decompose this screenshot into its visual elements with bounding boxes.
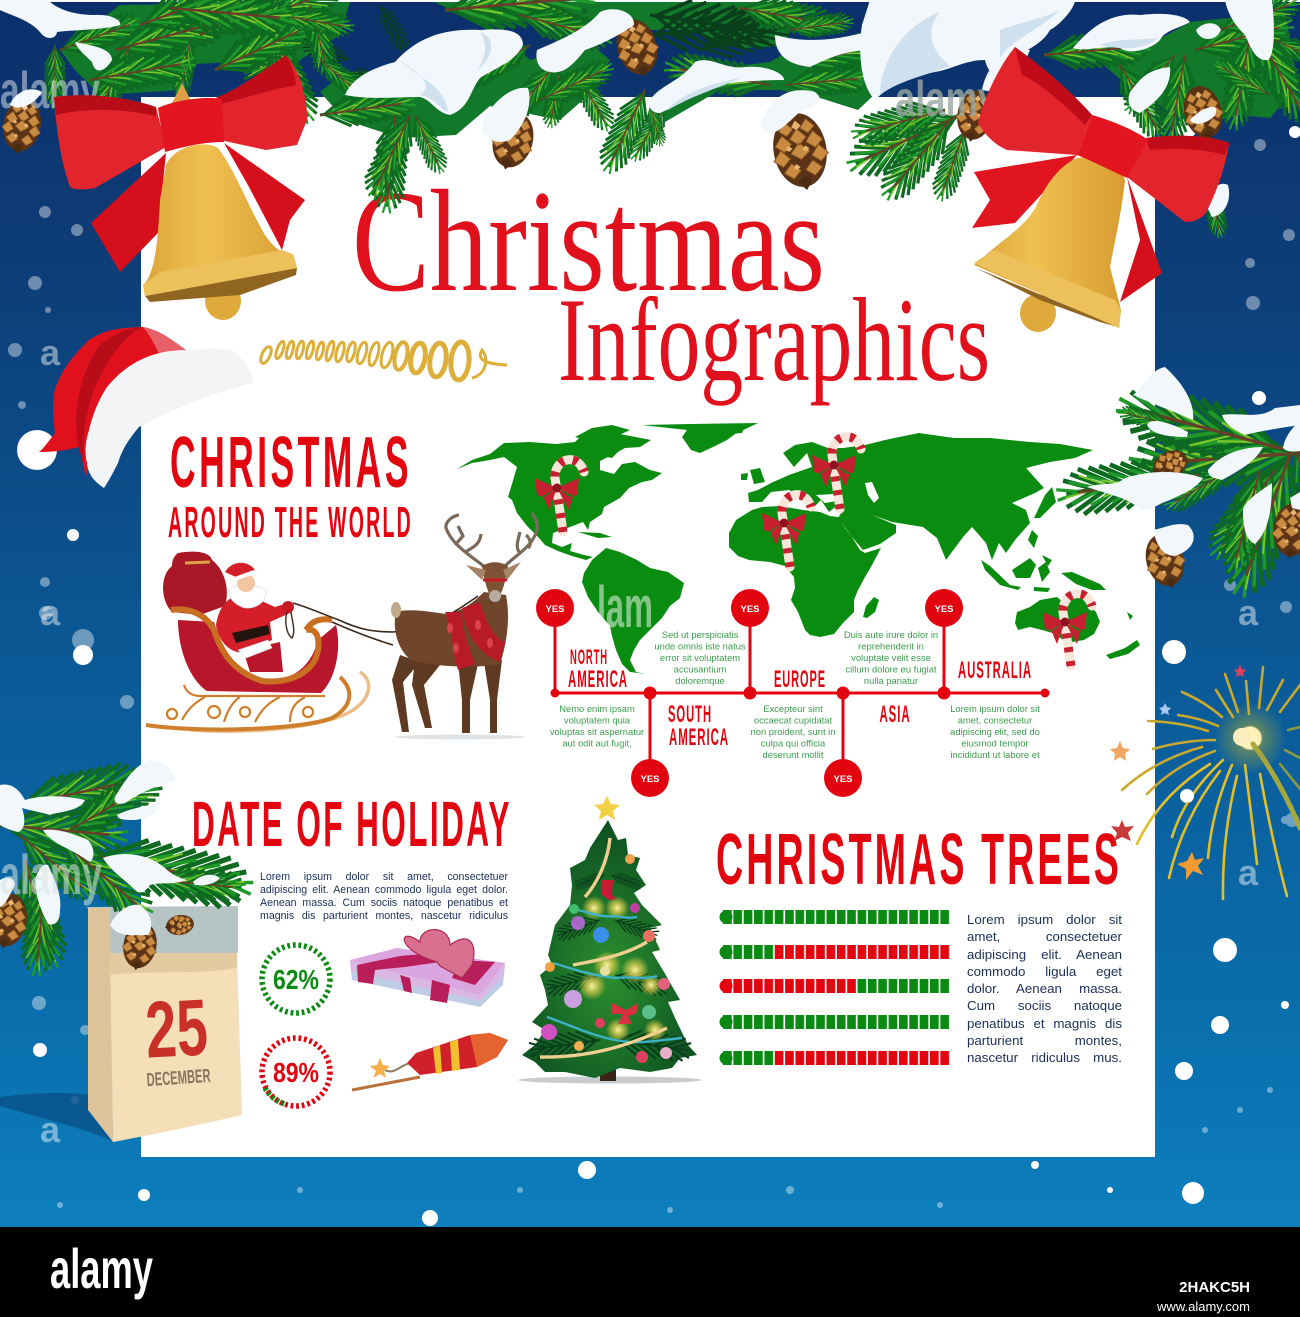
bow right loop inner [216, 55, 296, 105]
top white sliver [0, 0, 1300, 2]
yes labels: YES [545, 604, 565, 615]
bell underside [145, 268, 297, 302]
bar 4 [720, 1015, 950, 1029]
region descriptions: occaecat cupidatat [754, 714, 832, 726]
region descriptions: unde omnis iste natus [654, 640, 746, 652]
text block: christmas trees: Cum sociis natoque [967, 998, 1122, 1013]
bell hanger [172, 83, 192, 103]
watermark fragments: a [40, 592, 61, 633]
reins [293, 596, 478, 645]
footer image id: 2HAKC5H [1179, 1279, 1250, 1296]
calendar torn strip [110, 953, 237, 975]
watermark fragments: a [1238, 592, 1259, 633]
gauge: 62 percent: 62% [273, 964, 319, 995]
Eurasia [748, 433, 1093, 560]
calendar pine cone [119, 919, 161, 973]
Greenland [642, 423, 758, 453]
pine cones [0, 15, 1229, 195]
bridle [483, 578, 507, 582]
rein loop [286, 612, 294, 638]
firework rocket [352, 1033, 508, 1090]
snow on garland [0, 0, 1274, 217]
Santa beard [229, 584, 266, 608]
rear runner [190, 672, 369, 731]
New Zealand [1106, 612, 1140, 659]
fireworks [1110, 665, 1300, 899]
candy cane: North America [535, 460, 584, 532]
watermark fragments: a [1240, 74, 1257, 107]
text block: date of holiday [260, 871, 508, 922]
region descriptions: accusantium [674, 664, 726, 674]
watermark fragments: a [40, 332, 61, 373]
firework rays [1122, 667, 1300, 899]
region descriptions: cillum dolore eu fugiat [845, 664, 937, 674]
branch pine cones [1139, 529, 1191, 593]
heading: Christmas around the world [168, 423, 413, 547]
bar 5 [720, 1051, 950, 1065]
Santa coat fur [238, 640, 272, 658]
watermark fragments: a [1238, 852, 1259, 893]
region names: AMERICA [669, 724, 729, 751]
stocking ornament [601, 880, 617, 900]
hat pompom [17, 430, 57, 470]
region descriptions: non proident, sunt in [751, 726, 835, 737]
region names [568, 646, 1032, 751]
bell clapper [205, 282, 241, 320]
region descriptions: voluptate velit esse [851, 652, 931, 663]
sack tie [185, 562, 210, 563]
left pine branch [0, 758, 257, 978]
region names: NORTH [570, 646, 608, 669]
Iceland and UK [728, 426, 765, 484]
world map [457, 423, 1140, 674]
Santa coat [216, 595, 292, 652]
branch foliage [0, 758, 257, 978]
gift box [350, 930, 505, 1007]
branch snow [1087, 367, 1300, 556]
bead garland [540, 838, 667, 1057]
Santa hat [17, 327, 254, 488]
candy cane: Africa [762, 495, 811, 567]
Caspian and Black Sea [816, 482, 879, 503]
bar 1 [720, 910, 950, 924]
tree top star [594, 796, 620, 820]
watermark fragment at top left: alamy [0, 62, 100, 120]
reindeer tail [391, 602, 401, 618]
calendar pages [110, 953, 242, 1142]
Santa face [237, 574, 255, 592]
bow left loop inner [54, 95, 156, 116]
watermark fragment on South America: lam [597, 575, 653, 640]
region descriptions: eiusmod tempor [961, 738, 1029, 748]
left bell [54, 55, 307, 320]
title line: Infographics: Infographics [558, 273, 990, 406]
gauge: 89 percent: 89% [273, 1057, 319, 1088]
reindeer [391, 513, 537, 740]
Japan [1034, 487, 1056, 518]
reindeer muzzle [489, 590, 501, 602]
gauge: 62 percent [262, 945, 330, 1013]
branch cone right [1270, 502, 1300, 560]
text block: christmas trees: commodo ligula eget [967, 964, 1122, 979]
text block: christmas trees: parturient montes, [967, 1033, 1122, 1048]
reindeer legs [392, 655, 502, 733]
Santa mitten [282, 601, 294, 613]
firework core [1233, 728, 1251, 746]
tree ground shadow [518, 1076, 702, 1084]
calendar spine [88, 908, 113, 1142]
hat highlight [143, 327, 186, 356]
bell lip [974, 250, 1121, 328]
branch pine cones [0, 891, 32, 952]
branch snow [0, 760, 220, 935]
region descriptions: deserunt mollit [763, 749, 824, 760]
region descriptions: Nemo enim ipsam [559, 703, 635, 714]
gauge: 89 percent [262, 1038, 330, 1106]
Santa hat [225, 563, 255, 578]
reindeer head [482, 562, 508, 602]
Australia [1015, 596, 1100, 643]
region descriptions: nulla pariatur [864, 675, 918, 686]
region descriptions: doloremque [675, 675, 725, 686]
foliage [522, 820, 697, 1078]
Africa [729, 506, 881, 637]
calendar backing board [87, 906, 238, 953]
text block: christmas trees [967, 912, 1122, 1065]
pine sprigs [45, 0, 1300, 240]
trunk [600, 1068, 616, 1081]
timeline axis [555, 608, 1045, 778]
region names: EUROPE [774, 666, 826, 693]
bell body [974, 157, 1125, 328]
region descriptions: incididunt ut labore et [950, 749, 1040, 760]
stock footer bar [0, 1227, 1300, 1317]
candy cane: Europe [812, 437, 861, 509]
hat fold [76, 327, 143, 465]
gift ribbon [357, 952, 495, 1003]
bell clapper [1020, 294, 1056, 332]
title [352, 160, 990, 406]
sleigh runner [146, 677, 349, 729]
South America [582, 548, 684, 674]
Madagascar [863, 597, 879, 618]
snowball on firework [1180, 790, 1194, 802]
yes markers [536, 589, 963, 797]
branch foliage [1054, 378, 1300, 604]
yes labels [545, 604, 954, 785]
watermark fragments: a [40, 1109, 61, 1150]
snow shading [400, 10, 1158, 112]
timeline nodes [550, 686, 1050, 700]
gift bow [404, 930, 474, 978]
calendar date: 25 [143, 982, 210, 1075]
firework stars [1110, 665, 1246, 880]
region descriptions: voluptatem quia [564, 714, 631, 726]
sleigh with Santa [146, 552, 478, 731]
Cuba [578, 532, 612, 538]
reindeer body [395, 592, 508, 667]
cone tips behind branch [163, 912, 196, 938]
bell lip [143, 250, 297, 296]
region descriptions: Duis aute irure dolor in [844, 629, 938, 640]
bar 2 [720, 945, 950, 959]
yes labels: YES [740, 604, 760, 615]
text block: date of holiday: Lorem ipsum dolor sit amet, consectetuer [260, 871, 508, 883]
region descriptions: error sit voluptatem [660, 652, 740, 663]
hat red cap [39, 327, 186, 477]
foliage needles [528, 1028, 602, 1062]
progress bars [720, 910, 950, 1065]
red harness [445, 612, 475, 670]
cyan garland [547, 910, 682, 1042]
bow left loop [978, 47, 1092, 155]
right pine branch [1054, 367, 1300, 604]
footer url: www.alamy.com [1156, 1299, 1250, 1314]
watermark fragment on right bow: alamy [895, 71, 998, 127]
white infographic panel [141, 97, 1155, 1157]
New Guinea [1061, 572, 1106, 590]
antlers [446, 513, 537, 568]
Arctic islands [575, 425, 630, 458]
cone behind branch [1145, 444, 1193, 487]
yes labels: YES [640, 774, 660, 785]
bow right loop [1127, 136, 1229, 222]
bow lower tails [91, 153, 166, 272]
text: CHRISTMAS [170, 423, 412, 503]
region descriptions: Lorem ipsum dolor sit [950, 703, 1040, 714]
timeline: AUSTRALIA [958, 657, 1032, 684]
yes labels: YES [833, 774, 853, 785]
bow lower left tail [972, 155, 1077, 228]
region descriptions: Excepteur sint [763, 703, 823, 714]
text block: date of holiday: Aenean massa. Cum sociis natoque penatibus et [260, 897, 508, 909]
region descriptions: Sed ut perspiciatis [662, 629, 739, 640]
text block: christmas trees: amet, consectetuer [967, 929, 1122, 944]
Christmas tree [518, 796, 702, 1084]
Southeast Asian islands [981, 530, 1052, 592]
text: AROUND THE WORLD [168, 498, 413, 547]
region descriptions: reprehenderit in [858, 640, 924, 652]
hat white fur [86, 348, 254, 488]
region names: SOUTH [668, 701, 712, 728]
watermark fragments [40, 74, 1259, 1150]
calendar shadow [0, 1093, 114, 1142]
bow left loop inner [1015, 47, 1092, 125]
bow knot [1077, 115, 1148, 178]
region descriptions [550, 629, 1040, 760]
ground shadow [395, 734, 525, 740]
text block: date of holiday: adipiscing elit. Aenean commodo ligula eget dolor. [260, 884, 508, 896]
region descriptions: culpa qui officia [761, 738, 826, 748]
garland base foliage [60, 2, 1298, 138]
small bell ornament [612, 1003, 638, 1024]
firework glow [1214, 702, 1286, 774]
calendar month: DECEMBER [146, 1066, 211, 1091]
bow right loop [216, 55, 307, 150]
sleigh body [178, 620, 338, 693]
yes labels: YES [934, 604, 954, 615]
text block: christmas trees: nascetur ridiculus mus. [967, 1050, 1122, 1065]
top pine garland [0, 0, 1300, 240]
tree lights [578, 896, 666, 1042]
sleigh rim [171, 609, 332, 681]
region descriptions: amet, consectetur [958, 714, 1032, 726]
bow right loop inner [1146, 136, 1229, 155]
region descriptions: aut odit aut fugit, [562, 738, 632, 748]
bow left loop [54, 95, 166, 189]
Santa legs [243, 642, 283, 672]
watermark fragment on left branch: alamy [0, 843, 102, 906]
bar 3 [720, 979, 950, 993]
region descriptions: adipiscing elit, sed do [950, 726, 1040, 737]
gold streamer [259, 341, 507, 381]
tear-off calendar [87, 906, 242, 1142]
text block: christmas trees: dolor. Aenean massa. [967, 981, 1122, 996]
text: DATE OF HOLIDAY [192, 788, 512, 860]
right bell [972, 47, 1229, 332]
bell underside [976, 268, 1121, 328]
Santa belt [232, 625, 270, 643]
bow lower right tail [1120, 177, 1162, 302]
bell body [143, 144, 297, 296]
footer logo: alamy [50, 1237, 153, 1300]
North America [457, 430, 662, 560]
region names: AMERICA [568, 666, 628, 693]
ornaments [541, 854, 672, 1063]
sleigh scrollwork [167, 685, 325, 722]
text block: date of holiday: magnis dis parturient montes, nascetur ridiculus [260, 910, 508, 922]
region names: ASIA [880, 701, 910, 728]
reindeer ears [466, 562, 521, 580]
gift sides [350, 960, 505, 1007]
candy cane: Australia [1043, 594, 1092, 666]
region descriptions: voluptas sit aspernatur [550, 726, 644, 737]
dark back sprigs [300, 0, 792, 96]
text block: christmas trees: adipiscing elit. Aenean [967, 947, 1122, 962]
gift lid [350, 948, 505, 995]
bow knot [158, 98, 224, 152]
text block: christmas trees: penatibus et magnis dis [967, 1016, 1122, 1031]
title line: Christmas: Christmas [352, 160, 825, 322]
timeline [536, 589, 1050, 797]
gift sack [163, 552, 227, 615]
text block: christmas trees: Lorem ipsum dolor sit [967, 912, 1122, 927]
